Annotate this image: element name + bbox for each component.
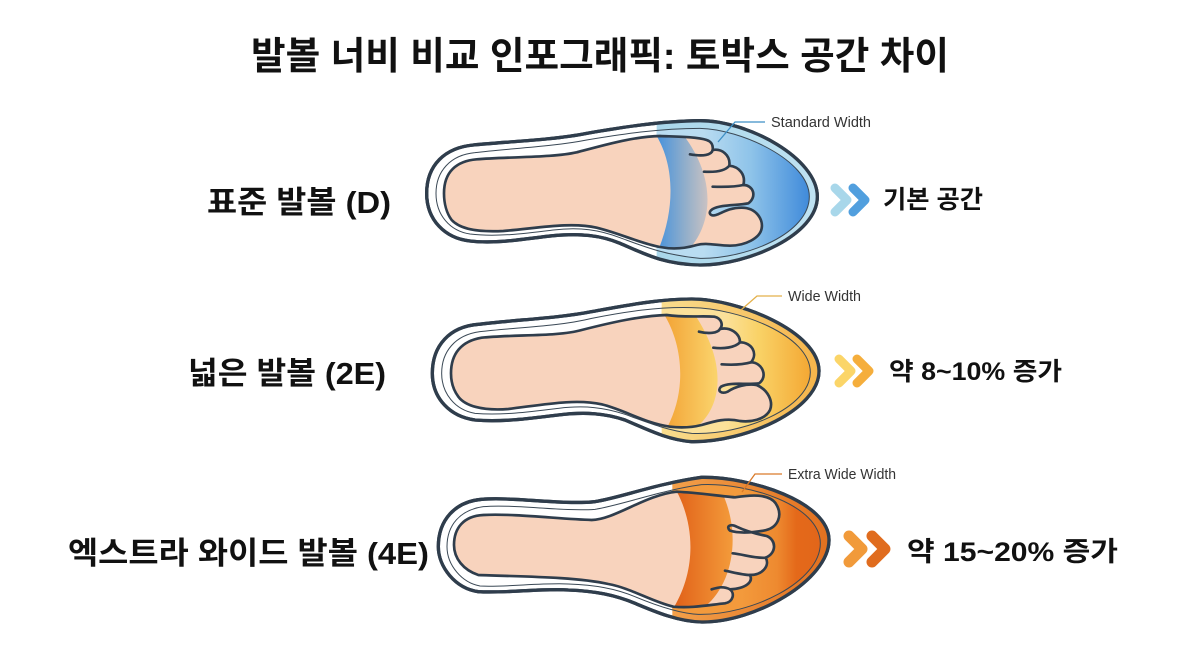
toe box shell — [672, 479, 828, 620]
toe box space — [662, 308, 810, 433]
inner line — [447, 485, 820, 614]
chevrons: yellow — [839, 359, 869, 383]
insole outer — [427, 121, 817, 265]
chevrons: blue — [835, 188, 865, 212]
insole outer — [432, 299, 819, 442]
label: standard width: 표준 발볼 (D) — [207, 185, 391, 220]
toe box space — [657, 129, 809, 258]
callout line: standard — [718, 122, 765, 142]
callout: extra wide width: Extra Wide Width — [788, 467, 896, 483]
outer outline — [438, 477, 829, 622]
toe separators — [699, 329, 751, 365]
label: wide width: 넓은 발볼 (2E) — [188, 356, 386, 391]
forefoot band — [658, 138, 708, 248]
toe box shell — [662, 300, 818, 440]
callout: standard width: Standard Width — [771, 115, 871, 131]
callout line: wide — [741, 296, 782, 310]
foot — [451, 315, 771, 427]
toe box space — [672, 486, 820, 613]
foot — [454, 492, 779, 607]
text: 8 to 10 percent: 약 8~10% 증가 — [889, 358, 1062, 386]
foot outline — [454, 492, 779, 607]
insole: wide width — [430, 297, 821, 444]
insole: extra wide width — [436, 476, 831, 624]
text: basic space: 기본 공간 — [883, 186, 983, 214]
insole outer — [438, 477, 829, 622]
outer outline — [432, 299, 819, 442]
inner line — [442, 308, 810, 433]
text: 15 to 20 percent: 약 15~20% 증가 — [907, 537, 1118, 567]
forefoot band — [663, 313, 718, 428]
toe separators — [690, 150, 743, 187]
chevrons: orange — [849, 536, 885, 562]
foot outline — [444, 136, 762, 248]
toe separators — [712, 553, 766, 589]
toe box shell — [656, 122, 816, 264]
outer outline — [427, 121, 817, 265]
insole: standard width — [425, 119, 819, 267]
forefoot band — [673, 488, 733, 608]
callout: wide width: Wide Width — [788, 289, 861, 305]
callout line: extra wide — [742, 474, 782, 492]
title: 발볼 너비 비교 인포그래픽: 토박스 공간 차이 — [251, 36, 949, 78]
foot — [444, 136, 762, 248]
foot outline — [451, 315, 771, 427]
label: extra wide width: 엑스트라 와이드 발볼 (4E) — [68, 536, 429, 571]
inner line — [436, 128, 809, 258]
